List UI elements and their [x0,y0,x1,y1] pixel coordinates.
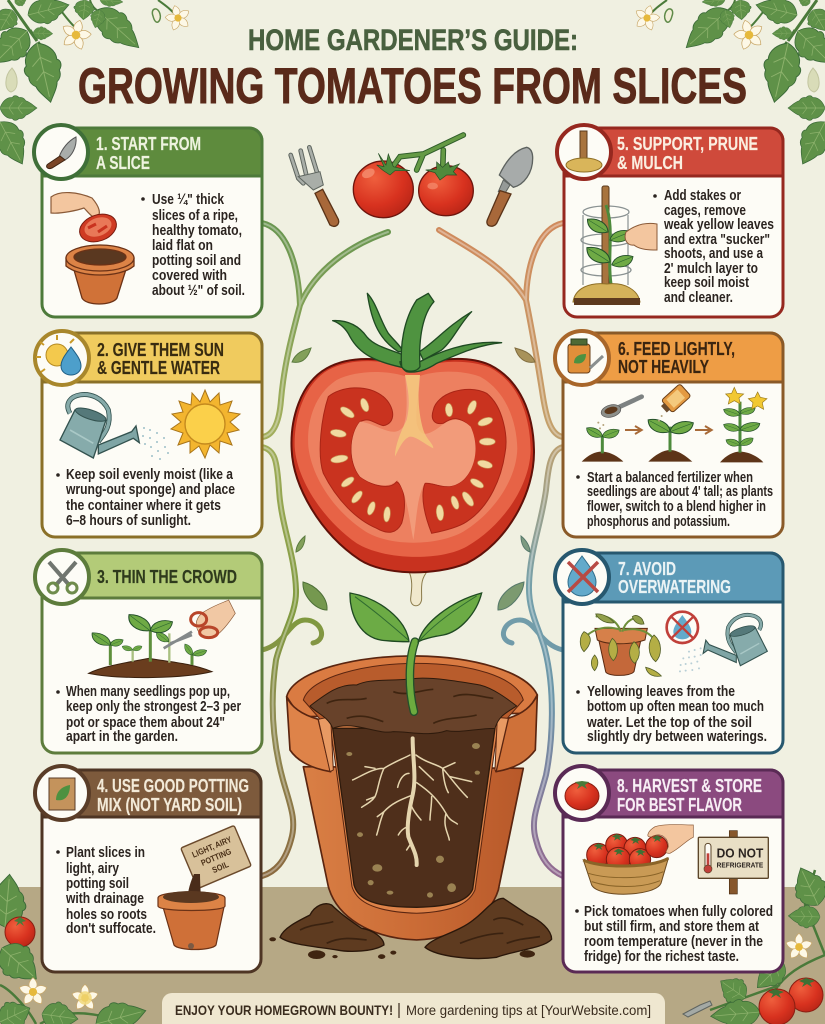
icon: no water sign [667,612,698,643]
heading: step 8: 8. HARVEST & STORE [617,775,762,796]
icon: garden trowel [487,147,533,226]
heading: step 1: 1. START FROM [96,133,201,154]
body text: step 1 [141,192,245,299]
body text: step 8 [575,904,773,965]
panel: step 6 feed lightly [555,331,783,537]
heading: step 7 [618,558,731,597]
illustration: staked plant in cage [573,186,657,305]
body text: step 4: with drainage [65,891,144,907]
body text: step 3: When many seedlings pop up, [66,684,230,700]
soil piles [269,898,552,959]
icon: crossed drop badge [555,550,609,604]
body text: step 8: Pick tomatoes when fully colored [584,904,773,920]
foliage: top-left corner [0,0,194,171]
body text: step 6: phosphorus and potassium. [587,514,730,530]
body text: step 8: fridge) for the richest taste. [584,949,739,965]
body text: step 3 [56,684,241,745]
heading: step 3: 3. THIN THE CROWD [97,566,237,587]
footer banner: ENJOY YOUR HOMEGROWN BOUNTY! [175,1002,393,1018]
heading: step 4: 4. USE GOOD POTTING [97,775,249,796]
body text: step 1: slices of a ripe, [152,208,238,224]
body text: step 4: Plant slices in [66,845,145,861]
heading: step 2: & GENTLE WATER [97,357,220,378]
heading: step 1: A SLICE [96,152,150,173]
panel: step 3 thin the crowd [35,550,262,753]
icon: knife badge [34,125,88,179]
icon: tomato badge [555,766,609,820]
body text: step 2 [56,467,235,529]
panel: step 7 avoid overwatering [555,550,783,753]
body text: step 2: the container where it gets [66,498,221,514]
heading: step 1 [96,133,201,173]
body text: step 7: water. Let the top of the soil [586,715,752,731]
heading: step 7: OVERWATERING [618,576,731,597]
illustration: watering can with spray [679,615,767,672]
heading: step 2: 2. GIVE THEM SUN [97,339,224,360]
heading: step 6: NOT HEAVILY [618,356,709,377]
heading: step 5 [617,133,758,173]
panel: step 4 potting mix [35,766,261,972]
body text: step 1: healthy tomato, [152,223,242,239]
tomato slice [291,293,534,606]
footer banner [162,993,665,1024]
body text: step 4 [56,845,156,937]
table surface [0,887,825,1024]
foliage: bottom-right corner [683,861,825,1024]
panel: step 5 support prune mulch [557,125,783,317]
body text: step 5: cages, remove [664,203,746,219]
icon: garden fork [291,147,339,226]
body text: step 8: but still firm, and store them at [584,919,759,935]
icon: sun and drop badge [35,331,89,385]
body text: step 7 [576,684,767,745]
illustration: seedlings and scissors [89,600,235,678]
heading: step 2 [97,339,224,378]
heading: step 5: & MULCH [617,152,683,173]
body text: step 1: Use ¼" thick [152,192,225,208]
illustration: do not refrigerate sign [698,831,768,894]
heading: step 6 [618,338,735,377]
heading: step 6: 6. FEED LIGHTLY, [618,338,735,359]
foliage: bottom-left corner [0,873,150,1024]
body text: step 4: holes so roots [66,907,147,923]
body text: step 1: about ½" of soil. [152,283,245,299]
heading: step 4: MIX (NOT YARD SOIL) [97,794,242,815]
icon: stake and mulch badge [557,125,611,179]
illustration: do not refrigerate sign: REFRIGERATE [717,862,764,869]
illustration: soil pouring into pot [158,874,225,950]
body text: step 2: Keep soil evenly moist (like a [66,467,234,483]
illustration: sun [171,390,240,458]
body text: step 6 [576,470,773,530]
body text: step 5: and extra "sucker" [664,232,770,248]
illustration: bag of potting soil: POTTING [199,846,233,868]
heading: step 4 [97,775,249,815]
vine: right [439,223,563,876]
heading: step 8: FOR BEST FLAVOR [617,794,742,815]
body text: step 3: keep only the strongest 2–3 per [66,699,241,715]
illustration: plant growth sequence with fertilizer [582,384,767,462]
panel: step 8 harvest and store [555,766,783,972]
body text: step 4: potting soil [66,876,129,892]
illustration: basket of tomatoes and hand [583,825,693,894]
heading: step 7: 7. AVOID [618,558,676,579]
body text: step 3: pot or space them about 24" [66,715,225,731]
body text: step 4: don't suffocate. [66,921,156,937]
body text: step 5: keep soil moist [664,275,749,291]
body text: step 1: covered with [152,268,227,284]
illustration: watering can [60,395,139,458]
body text: step 5: 2' mulch layer to [664,261,758,277]
heading: step 5: 5. SUPPORT, PRUNE [617,133,758,154]
body text: step 7: slightly dry between waterings. [587,729,767,745]
illustration: bag of potting soil: LIGHT, AIRY [190,834,233,860]
icon: fertilizer jar badge [555,331,609,385]
body text: step 5: Add stakes or [664,188,741,204]
body text: step 5 [653,188,774,306]
body text: step 5: shoots, and use a [664,246,764,262]
illustration: bag of potting soil: SOIL [211,859,230,875]
icon: scissors badge [35,550,89,604]
seedling [350,593,482,712]
body text: step 4: light, airy [66,861,119,877]
panel: step 2 sun and water [35,331,262,537]
vine: left [262,223,388,876]
body text: step 7: Yellowing leaves from the [587,684,735,700]
illustration: pot with soil [66,245,134,304]
body text: step 2: wrung-out sponge) and place [65,482,235,498]
body text: step 3: apart in the garden. [66,729,178,745]
body text: step 5: and cleaner. [664,290,733,306]
illustration: droopy plant in pot [580,614,661,676]
body text: step 1: laid flat on [152,238,213,254]
illustration: do not refrigerate sign: DO NOT [717,847,764,861]
illustration: hand placing slice [51,193,120,247]
illustration: bag of potting soil [181,825,251,889]
terracotta pot with cutaway soil and roots [287,656,537,940]
body text: step 6: flower, switch to a blend higher in [587,499,766,515]
body text: step 8: room temperature (never in the [584,934,763,950]
icon: bag badge [35,766,89,820]
illustration: water spray [142,427,169,460]
heading: step 8 [617,775,762,815]
panel: step 1 start from a slice [34,125,262,317]
title: line one: HOME GARDENER’S GUIDE: [248,24,578,57]
foliage: top-right corner [631,0,825,171]
body text: step 6: Start a balanced fertilizer when [587,470,753,486]
footer banner: More gardening tips at [YourWebsite.com] [406,1002,651,1018]
body text: step 7: bottom up often mean too much [587,699,764,715]
body text: step 2: 6–8 hours of sunlight. [66,513,191,529]
body text: step 1: potting soil and [152,253,241,269]
body text: step 5: weak yellow leaves [663,217,774,233]
icon: tomatoes on the vine [353,135,473,218]
